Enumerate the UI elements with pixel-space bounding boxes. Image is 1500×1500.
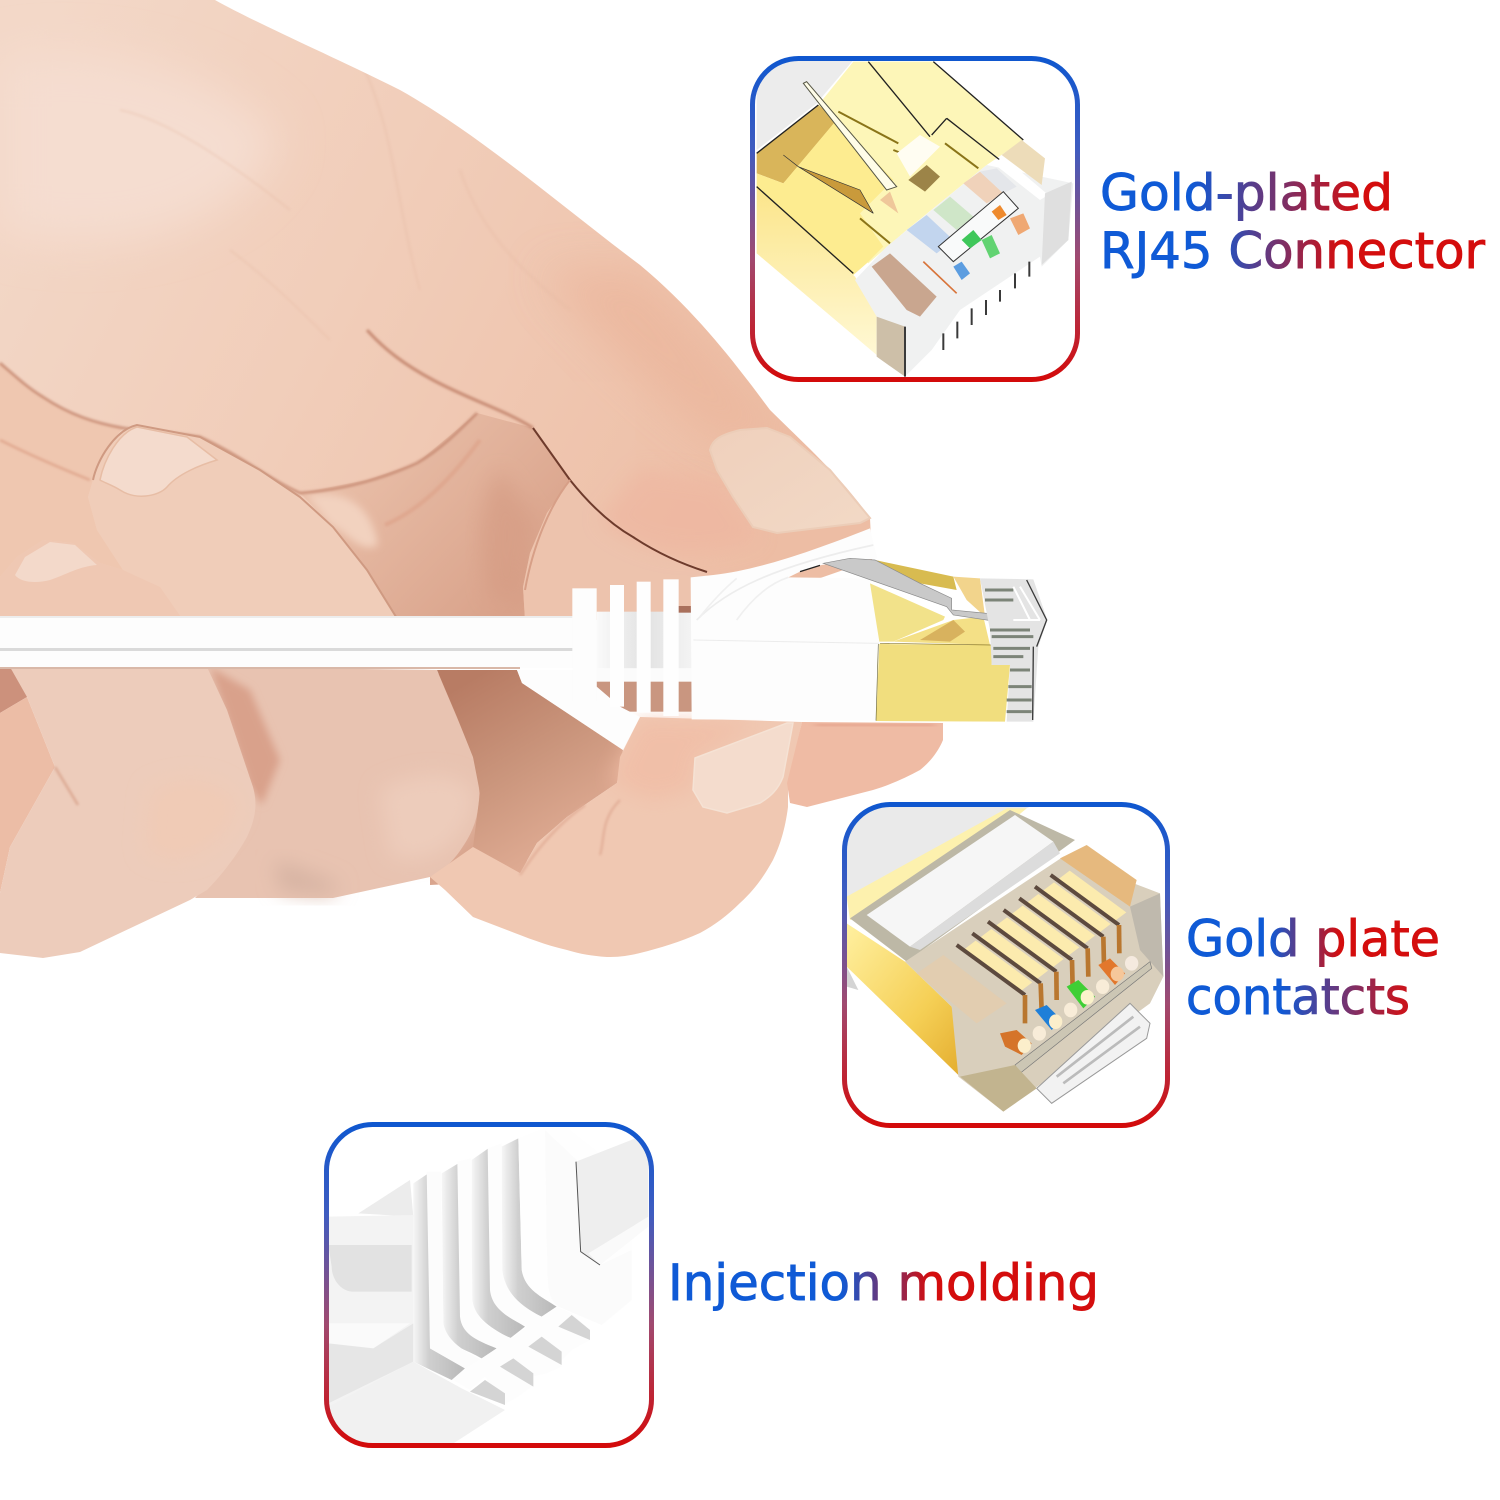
thumb nail (710, 428, 870, 533)
gold shield (876, 644, 1010, 722)
coloured wire ends (1000, 956, 1138, 1055)
shadowed palm below the cable (437, 670, 623, 873)
flat cable end (576, 1133, 648, 1265)
hand holding the connector (0, 0, 943, 958)
contacts close-up image (846, 806, 1166, 1124)
wire colour bands and clear housing (855, 140, 1073, 377)
white plug body (691, 528, 879, 721)
label: Gold-plated RJ45 Connector (1100, 164, 1485, 280)
small finger tip with nail (0, 540, 183, 620)
label: Gold plate contatcts: contatcts (1186, 968, 1410, 1026)
gold contact blades (957, 871, 1126, 1023)
panel border (752, 58, 1078, 380)
white ribs (426, 1174, 465, 1368)
panel: injection molding (326, 1124, 652, 1447)
label: Gold-plated RJ45 Connector: RJ45 Connector (1100, 222, 1485, 280)
latch wire (823, 558, 1008, 623)
rib shadows (413, 1173, 465, 1380)
palm in shadow (300, 413, 570, 620)
lower tab (517, 670, 640, 750)
upper hand and thumb base (0, 0, 872, 620)
transparent latch (960, 962, 1152, 1112)
lower thumb (430, 717, 943, 957)
panel: gold plate contacts (844, 804, 1168, 1126)
cable and plug (0, 528, 1047, 750)
label: Injection molding: Injection molding (668, 1254, 1099, 1312)
strain relief boot (517, 579, 693, 750)
label: Gold plate contatcts (1186, 910, 1440, 1026)
creases on the hand (0, 54, 800, 590)
lower fingers (0, 667, 530, 958)
panel border (844, 804, 1168, 1126)
label: Gold plate contatcts: Gold plate (1186, 910, 1440, 968)
label: Gold-plated RJ45 Connector: Gold-plated (1100, 164, 1393, 222)
panel: gold-plated RJ45 connector (752, 58, 1078, 380)
finger behind, under index tip (523, 480, 707, 620)
molded boot close-up image (328, 1126, 650, 1447)
connector close-up image (754, 60, 1076, 378)
finger with nail (88, 425, 398, 620)
panel border (326, 1124, 652, 1446)
transparent tip (980, 578, 1047, 722)
flat cable (0, 616, 580, 669)
